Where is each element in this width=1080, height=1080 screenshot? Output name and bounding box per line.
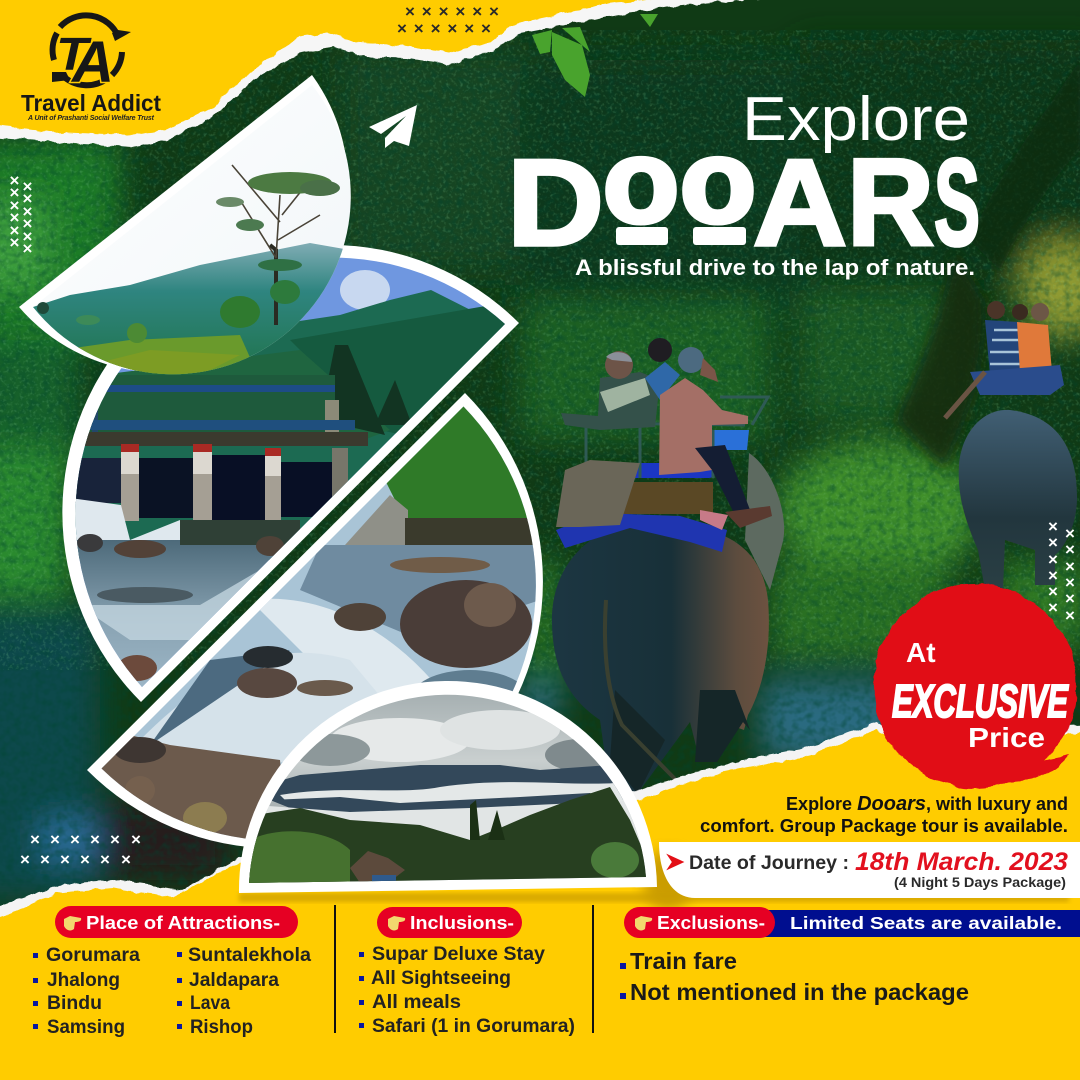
decorative crosses left: × (10, 171, 20, 190)
title wordmark: DOOARS: R (847, 135, 934, 272)
decorative crosses right: × (1048, 582, 1058, 601)
elephant head behind (745, 453, 784, 590)
title line: Explore: Explore (742, 85, 970, 154)
decorative crosses left: × (10, 196, 20, 215)
hill photo white shape (19, 75, 348, 372)
inclusions list: Supar Deluxe Stay (372, 943, 545, 965)
elephant body (552, 522, 769, 793)
heading pill: Inclusions- (410, 912, 514, 933)
list column two (177, 944, 311, 1038)
title: Explore Dooars (507, 85, 980, 280)
logo emblem: T (56, 28, 92, 80)
inclusions list: Safari (1 in Gorumara) (372, 1015, 575, 1037)
list column two: Rishop (190, 1016, 253, 1038)
inclusions list: All Sightseeing (371, 967, 511, 989)
photo panel: hill tree (10, 70, 360, 380)
inclusions list (359, 943, 575, 1037)
decorative crosses left: × (10, 233, 20, 252)
elephant tail (605, 600, 676, 780)
decorative crosses right: × (1065, 557, 1075, 576)
heading pill (377, 907, 522, 938)
list column two: Lava (190, 992, 230, 1014)
list column two: Jaldapara (189, 969, 279, 991)
decorative crosses left: × (22, 177, 32, 196)
logo wordmark: Travel Addict (21, 90, 161, 116)
heading pill: Place of Attractions- (86, 912, 280, 933)
text block: package description: Explore Dooars, with luxury and (786, 793, 1068, 815)
title wordmark: DOOARS: o (680, 116, 756, 248)
panel: place of attractions (33, 906, 311, 1038)
river photo white shape (87, 393, 543, 848)
list column one: Bindu (47, 992, 102, 1014)
panel: top yellow torn paper banner (0, 0, 780, 147)
decorative crosses left: × (22, 214, 32, 233)
banner: limited seats (760, 910, 1080, 937)
seat (586, 397, 768, 478)
list column one: Samsing (47, 1016, 125, 1038)
elephant with riders (552, 338, 784, 794)
heading pill (55, 906, 298, 938)
date value: 18th March. 2023 (855, 848, 1068, 876)
panel: date of journey (659, 842, 1080, 898)
tagline: A blissful drive to the lap of nature. (575, 255, 975, 280)
elephant cloth and rope (556, 482, 728, 552)
decorative crosses right: × (1048, 533, 1058, 552)
decorative crosses right: × (1048, 598, 1058, 617)
decorative crosses right: × (1048, 517, 1058, 536)
decorative crosses top: ×××××× (405, 2, 499, 21)
icon: red arrow (669, 856, 682, 868)
decorative crosses left: × (22, 239, 32, 258)
inclusions list: All meals (372, 991, 461, 1013)
decorative crosses right: × (1065, 606, 1075, 625)
photo panel: clouds over hills (239, 681, 660, 893)
logo emblem: A (70, 30, 114, 95)
Price: Price (968, 722, 1045, 753)
decorative crosses right: × (1065, 524, 1075, 543)
decorative crosses bottom left second row: ×××××× (20, 850, 131, 869)
callout: red At Exclusive Price splash (873, 584, 1077, 788)
logo tagline: A Unit of Prashanti Social Welfare Trust (27, 115, 155, 122)
exclusions list: Train fare (630, 948, 737, 974)
white date pill (659, 842, 1080, 898)
list column two: Suntalekhola (188, 944, 311, 966)
clouds photo white shape (239, 681, 657, 893)
decorative crosses right: × (1065, 589, 1075, 608)
exclusions list (620, 948, 969, 1005)
red brush splash (873, 584, 1077, 788)
second elephant with riders (945, 301, 1077, 590)
text block: package description (700, 793, 1068, 836)
title wordmark: DOOARS: A (753, 135, 847, 272)
rider one (556, 351, 660, 527)
list column one (33, 944, 140, 1038)
decorative crosses left: × (22, 227, 32, 246)
photo panel: dam and river (60, 245, 530, 710)
decorative crosses left: × (22, 202, 32, 221)
decorative crosses bottom left: ×××××× (30, 830, 141, 849)
photo panel: river rocks (87, 393, 543, 846)
decorative crosses left: × (10, 183, 20, 202)
date label: Date of Journey : (689, 852, 849, 874)
decorative crosses left: × (10, 208, 20, 227)
panel: inclusions (359, 907, 575, 1037)
list column one: Gorumara (46, 944, 140, 966)
text block: package description: comfort. Group Package tour is available. (700, 816, 1068, 836)
logo emblem (52, 15, 131, 95)
decorative crosses left (10, 171, 32, 258)
decorative crosses right: × (1065, 573, 1075, 592)
title wordmark: DOOARS (507, 116, 980, 272)
decorative crosses left: × (22, 189, 32, 208)
title wordmark: DOOARS: o (603, 116, 679, 248)
package duration: (4 Night 5 Days Package) (894, 875, 1066, 890)
decorative crosses right (1048, 517, 1075, 625)
tree trunk mass (895, 250, 986, 470)
panel: bottom yellow torn paper (0, 722, 1080, 1080)
title wordmark: DOOARS: S (934, 135, 980, 272)
elephant far legs (610, 690, 750, 794)
list column one: Jhalong (47, 969, 120, 991)
decorative crosses left: × (10, 221, 20, 240)
title wordmark: DOOARS: D (507, 135, 604, 272)
At: At (906, 637, 936, 668)
heading pill: Exclusions- (657, 913, 765, 933)
heading pill (624, 907, 775, 938)
decorative crosses top second row: ×××××× (397, 19, 491, 38)
decorative crosses right: × (1048, 550, 1058, 569)
logo: Travel Addict (21, 15, 161, 122)
rider two (645, 338, 680, 400)
banner: limited seats: Limited Seats are available. (790, 913, 1062, 933)
rider three (659, 347, 772, 528)
dam photo white shape (62, 245, 519, 702)
exclusions list: Not mentioned in the package (630, 979, 969, 1005)
leaves under banner (532, 14, 658, 97)
icon: paper plane (369, 105, 417, 148)
decorative crosses right: × (1065, 540, 1075, 559)
panel: exclusions (620, 907, 969, 1005)
decorative crosses right: × (1048, 566, 1058, 585)
